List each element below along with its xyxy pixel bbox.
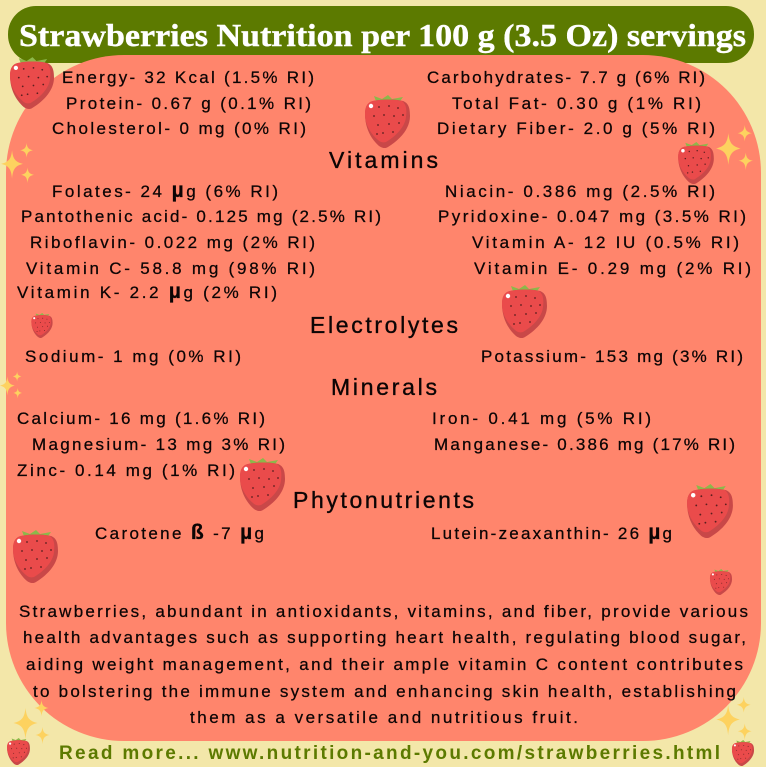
summary paragraph: Strawberries, abundant in antioxidants, vitamins, and fiber, provide various: [19, 602, 748, 621]
icon: strawberry: [678, 142, 714, 184]
minerals list: Calcium- 16 mg (1.6% RI): [17, 409, 265, 428]
minerals list: Iron- 0.41 mg (5% RI): [432, 409, 651, 428]
icon: strawberry: [732, 740, 754, 766]
icon: strawberry: [687, 484, 733, 538]
summary paragraph: them as a versatile and nutritious fruit.: [190, 708, 578, 727]
macronutrients: Carbohydrates- 7.7 g (6% RI): [427, 68, 705, 87]
vitamins list: Folates- 24 µg (6% RI): [52, 179, 278, 202]
electrolytes list: [25, 347, 743, 366]
vitamins list: Pantothenic acid- 0.125 mg (2.5% RI): [21, 207, 381, 226]
heading: phytonutrients: Phytonutrients: [293, 487, 474, 513]
icon: strawberry: [7, 738, 30, 765]
macronutrients: [52, 68, 715, 138]
minerals list: [17, 409, 735, 480]
phytonutrients list: [95, 521, 672, 544]
vitamins list: Riboflavin- 0.022 mg (2% RI): [30, 233, 315, 252]
icon: strawberry: [240, 458, 285, 511]
vitamins list: Vitamin C- 58.8 mg (98% RI): [26, 259, 315, 278]
heading: minerals: Minerals: [331, 374, 437, 400]
heading: electrolytes: Electrolytes: [310, 312, 458, 338]
icon: strawberry: [365, 95, 410, 148]
vitamins list: Vitamin K- 2.2 µg (2% RI): [17, 280, 277, 303]
icon: sparkles: [1, 143, 34, 183]
source link: Read more... www.nutrition-and-you.com/strawberries.html: [59, 743, 720, 764]
vitamins list: Niacin- 0.386 mg (2.5% RI): [445, 182, 715, 201]
icon: strawberry: [10, 57, 54, 109]
icon: sparkles: [716, 697, 752, 740]
minerals list: Zinc- 0.14 mg (1% RI): [17, 461, 235, 480]
vitamins list: Vitamin E- 0.29 mg (2% RI): [474, 259, 751, 278]
electrolytes list: Potassium- 153 mg (3% RI): [481, 347, 743, 366]
minerals list: Magnesium- 13 mg 3% RI): [32, 435, 285, 454]
macronutrients: Cholesterol- 0 mg (0% RI): [52, 119, 306, 138]
summary paragraph: health advantages such as supporting heart health, regulating blood sugar,: [23, 628, 746, 647]
minerals list: Manganese- 0.386 mg (17% RI): [434, 435, 735, 454]
summary paragraph: to bolstering the immune system and enhancing skin health, establishing: [33, 682, 736, 701]
macronutrients: Dietary Fiber- 2.0 g (5% RI): [437, 119, 715, 138]
macronutrients: Total Fat- 0.30 g (1% RI): [452, 94, 701, 113]
phytonutrients list: Lutein-zeaxanthin- 26 µg: [431, 521, 672, 544]
icon: strawberry: [13, 530, 58, 583]
heading: vitamins: Vitamins: [329, 147, 438, 173]
icon: sparkles: [14, 700, 50, 744]
vitamins list: Pyridoxine- 0.047 mg (3.5% RI): [438, 207, 746, 226]
icon: strawberry: [31, 313, 53, 338]
vitamins list: Vitamin A- 12 IU (0.5% RI): [472, 233, 739, 252]
phytonutrients list: Carotene ß -7 µg: [95, 521, 264, 544]
icon: sparkles: [716, 125, 753, 170]
macronutrients: Energy- 32 Kcal (1.5% RI): [62, 68, 314, 87]
icon: strawberry: [710, 569, 732, 595]
title: Strawberries Nutrition per 100 g (3.5 Oz) servings: [19, 17, 746, 53]
electrolytes list: Sodium- 1 mg (0% RI): [25, 347, 241, 366]
macronutrients: Protein- 0.67 g (0.1% RI): [66, 94, 311, 113]
title banner: [8, 6, 754, 63]
summary paragraph: [19, 602, 748, 727]
summary paragraph: aiding weight management, and their ample vitamin C content contributes: [26, 655, 743, 674]
vitamins list: [17, 179, 751, 303]
icon: sparkles: [0, 372, 22, 398]
icon: strawberry: [502, 285, 547, 338]
